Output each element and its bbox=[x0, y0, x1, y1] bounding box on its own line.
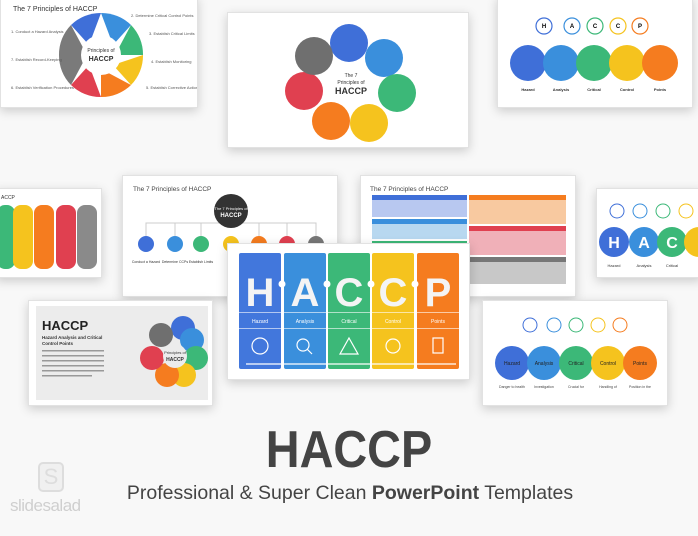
slide: mid-right table bbox=[360, 175, 576, 297]
slide: center main HACCP columns: H bbox=[246, 271, 274, 315]
slide: bottom-right HACCP circles: Control bbox=[600, 361, 616, 367]
slide: top-right HACCP circles: Hazard bbox=[521, 87, 535, 92]
slide: top-right HACCP circles: P bbox=[638, 24, 642, 30]
slide: bottom-left HACCP intro: Hazard Analysis and Critical bbox=[42, 335, 102, 340]
slide: mid-left pills bbox=[0, 188, 102, 278]
slide: bottom-right HACCP circles: Investigation bbox=[534, 385, 554, 389]
slide: top-left 7 principles radial: 1. Conduct a Hazard Analysis bbox=[11, 29, 63, 34]
slide: mid tree diagram: Conduct a Hazard bbox=[132, 260, 160, 264]
slide: center main HACCP columns: A bbox=[291, 271, 319, 315]
logo: slidesalad bbox=[10, 462, 81, 515]
slide: center main HACCP columns: P bbox=[425, 271, 451, 315]
slide: top-left 7 principles radial: 3. Establish Critical Limits bbox=[149, 31, 195, 36]
slide: right edge HACCP circles: Critical bbox=[666, 263, 678, 268]
slide: right edge HACCP circles: Analysis bbox=[637, 263, 651, 268]
logo: slidesalad: slidesalad bbox=[10, 496, 81, 515]
logo: slidesalad: S bbox=[44, 464, 58, 489]
slide: mid tree diagram: HACCP bbox=[220, 213, 242, 219]
slide: bottom-right HACCP circles: Handling of bbox=[599, 385, 617, 389]
slide: top-center 7 principles circle bbox=[227, 12, 469, 148]
slide: top-right HACCP circles: C bbox=[616, 24, 621, 30]
slide: right edge HACCP circles: Hazard bbox=[608, 263, 620, 268]
slide: bottom-left HACCP intro: Principles of bbox=[164, 350, 187, 355]
slide: bottom-left HACCP intro: Control Points bbox=[42, 341, 73, 346]
slide: top-center 7 principles circle: The 7 bbox=[345, 73, 358, 79]
slide: top-right HACCP circles bbox=[497, 0, 693, 108]
slide: bottom-left HACCP intro: HACCP bbox=[42, 318, 89, 333]
slide: top-right HACCP circles: A bbox=[570, 24, 575, 30]
slide: right edge HACCP circles: H bbox=[608, 235, 620, 252]
slide: top-center 7 principles circle: HACCP bbox=[335, 86, 367, 96]
slide: right edge HACCP circles: C bbox=[666, 235, 678, 252]
slide: bottom-right HACCP circles bbox=[482, 300, 668, 406]
slide: bottom-left HACCP intro bbox=[28, 300, 213, 406]
slide: center main HACCP columns: Critical bbox=[341, 319, 357, 325]
slide: mid tree diagram: The 7 Principles of bbox=[214, 206, 248, 211]
slide: top-right HACCP circles: Critical bbox=[587, 87, 601, 92]
slide: center main HACCP columns: Points bbox=[431, 319, 445, 325]
slide: bottom-right HACCP circles: Crucial for bbox=[568, 385, 585, 389]
slide: mid-left pills: ACCP bbox=[1, 195, 16, 201]
slide: bottom-right HACCP circles: Critical bbox=[568, 361, 584, 367]
slide: bottom-right HACCP circles: Hazard bbox=[504, 361, 520, 367]
slide: top-center 7 principles circle: Principles of bbox=[337, 80, 365, 86]
slide: center main HACCP columns: C bbox=[335, 271, 363, 315]
slide: bottom-right HACCP circles: Analysis bbox=[535, 361, 554, 367]
slide: top-left 7 principles radial: HACCP bbox=[89, 56, 114, 63]
slide: top-right HACCP circles: Points bbox=[654, 87, 667, 92]
slide: mid tree diagram: The 7 Principles of HACCP bbox=[133, 186, 211, 193]
slide: top-right HACCP circles: H bbox=[542, 24, 546, 30]
slide: mid-right table: The 7 Principles of HACCP bbox=[370, 186, 448, 193]
slide: mid tree diagram: Establish Limits bbox=[189, 260, 213, 264]
slide: top-left 7 principles radial: Principles of bbox=[87, 48, 115, 54]
slide: center main HACCP columns: C bbox=[379, 271, 407, 315]
slide: top-left 7 principles radial: 7. Establish Record-Keeping bbox=[11, 57, 62, 62]
slide: top-right HACCP circles: C bbox=[593, 24, 598, 30]
slide: top-left 7 principles radial: 6. Establish Verification Procedures bbox=[11, 85, 74, 90]
slide: bottom-right HACCP circles: Danger to health bbox=[499, 385, 525, 389]
slide: right edge HACCP circles: A bbox=[638, 235, 650, 252]
title: HACCP bbox=[266, 421, 432, 479]
slide: center main HACCP columns: Analysis bbox=[296, 319, 315, 325]
slide: right edge HACCP circles bbox=[596, 188, 698, 278]
slide: bottom-right HACCP circles: Points bbox=[633, 361, 647, 367]
slide: top-right HACCP circles: Control bbox=[620, 87, 634, 92]
slide: top-right HACCP circles: Analysis bbox=[553, 87, 570, 92]
slide: bottom-left HACCP intro: HACCP bbox=[166, 357, 185, 363]
slide: top-left 7 principles radial: 4. Establish Monitoring bbox=[151, 59, 191, 64]
slide: top-left 7 principles radial: 2. Determine Critical Control Points bbox=[131, 13, 193, 18]
slide: mid tree diagram: Determine CCPs bbox=[162, 260, 188, 264]
slide: center main HACCP columns: Hazard bbox=[252, 319, 268, 325]
slide: center main HACCP columns: Control bbox=[385, 319, 401, 325]
slide: center main HACCP columns bbox=[227, 243, 470, 380]
slide: top-left 7 principles radial: The 7 Principles of HACCP bbox=[13, 6, 98, 13]
slide: bottom-right HACCP circles: Position in the bbox=[629, 385, 651, 389]
slide: top-left 7 principles radial bbox=[0, 0, 198, 108]
subtitle: Professional & Super Clean PowerPoint Templates bbox=[127, 482, 573, 504]
slide: mid tree diagram bbox=[122, 175, 338, 297]
